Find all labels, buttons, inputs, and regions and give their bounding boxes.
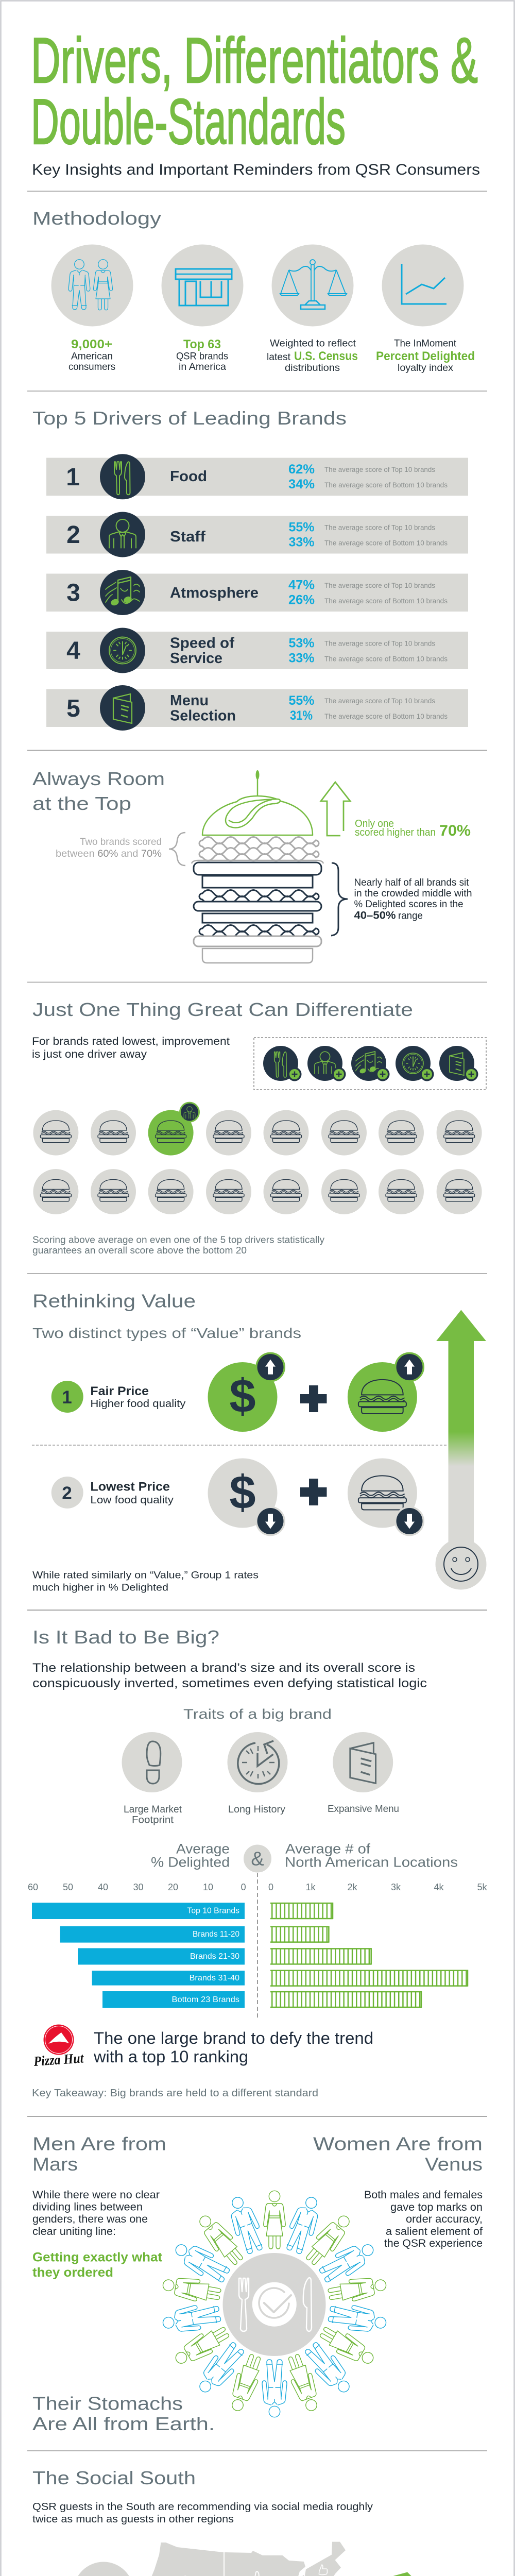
axis labels: 50	[63, 1882, 73, 1892]
stat: census weighting: latest	[267, 352, 291, 363]
text: both males and females: order accuracy,	[406, 2213, 483, 2225]
icon: long history clock	[228, 1732, 287, 1792]
panel: top 5 drivers	[32, 408, 468, 731]
text: both males and females: the QSR experience	[384, 2238, 483, 2249]
subheading: traits: Traits of a big brand	[183, 1706, 332, 1722]
stat: 9,000+ consumers: 9,000+	[71, 337, 112, 351]
driver row 1: food: 62%	[288, 462, 315, 477]
axis labels: 0	[268, 1882, 273, 1892]
people ring	[161, 2191, 388, 2417]
bar chart: average % delighted: Brands 21-30	[190, 1952, 239, 1961]
item: lowest price: 2	[62, 1483, 72, 1503]
panel: methodology	[32, 208, 475, 374]
heading: their stomachs	[32, 2393, 215, 2434]
driver row 3: atmosphere: Atmosphere	[170, 585, 259, 601]
stat: percent delighted index	[376, 338, 475, 374]
burger grid	[33, 1102, 482, 1214]
axis labels: 5k	[477, 1882, 488, 1892]
driver row 5: menu selection: 31%	[290, 708, 313, 723]
driver row 2: staff: 33%	[288, 535, 314, 549]
stat: percent delighted index: loyalty index	[398, 363, 454, 374]
heading: women are from venus: Venus	[425, 2154, 483, 2175]
item: lowest price: $	[229, 1466, 256, 1519]
driver row 1: food: The average score of Bottom 10 brands	[324, 481, 448, 489]
axis labels: 10	[203, 1882, 213, 1892]
stat: top 63 brands	[176, 337, 228, 372]
text: both males and females: Both males and females	[364, 2189, 483, 2201]
heading: men are from mars: Men Are from	[32, 2133, 166, 2155]
heading: always room at the top	[32, 768, 165, 814]
text: both males and females	[364, 2189, 483, 2249]
item: fair price	[52, 1352, 424, 1432]
text: group 1 rates higher: While rated similarly on “Value,” Group 1 rates	[32, 1570, 259, 1581]
text: one large brand: with a top 10 ranking	[93, 2047, 248, 2066]
text: no clear dividing lines	[32, 2189, 160, 2238]
driver row 4: speed of service: 33%	[288, 651, 314, 665]
callout: two brands 60-70%: between 60% and 70%	[56, 849, 162, 859]
dashed box: driver icons	[254, 1038, 486, 1090]
text: guests in the south: twice as much as guests in other regions	[32, 2514, 234, 2525]
icon: footprint	[122, 1732, 182, 1792]
callout: only one above 70%: Only one	[355, 818, 394, 829]
heading: top 5 drivers: Top 5 Drivers of Leading Brands	[32, 408, 347, 429]
icon: stacked burger	[192, 770, 323, 963]
callout: crowded middle: % Delighted scores in the	[354, 899, 464, 910]
axis labels: 4k	[434, 1882, 444, 1892]
icon: store	[162, 244, 243, 327]
text: group 1 rates higher	[32, 1570, 259, 1593]
text: group 1 rates higher: much higher in % Delighted	[32, 1583, 168, 1593]
trait labels	[124, 1804, 399, 1826]
callout: two brands 60-70%: Two brands scored	[80, 837, 162, 848]
axis labels: 0	[241, 1882, 246, 1892]
text: scoring above average: Scoring above average on even one of the 5 top drivers statistically	[32, 1234, 324, 1245]
panel: just one thing great	[32, 999, 486, 1256]
panel: always room at the top	[32, 768, 472, 963]
axis labels: 20	[168, 1882, 178, 1892]
panel: is it bad to be big	[28, 1626, 488, 2099]
heading: social south: The Social South	[32, 2467, 196, 2488]
text: relationship: conspicuously inverted, sometimes even defying statistical logic	[32, 1676, 427, 1690]
icon: scales	[272, 244, 353, 327]
item: fair price: Higher food quality	[90, 1398, 185, 1410]
subtitle: Key Insights and Important Reminders from QSR Consumers	[32, 161, 480, 178]
callout: only one above 70%	[355, 818, 471, 839]
heading: always room at the top: Always Room	[32, 768, 165, 789]
driver row 5: menu selection: The average score of Top 10 brands	[324, 697, 435, 705]
heading: men are from mars	[32, 2133, 166, 2175]
item: fair price: Fair Price	[90, 1384, 149, 1398]
heading: always room at the top: at the Top	[32, 793, 131, 814]
stat: percent delighted index: Percent Delighted	[376, 349, 475, 363]
callout: getting what they ordered: Getting exactly what	[32, 2250, 163, 2265]
trait labels: Expansive Menu	[328, 1804, 399, 1815]
arrow: up outline	[321, 782, 350, 836]
icon: consumers	[52, 244, 133, 327]
driver row 4: speed of service: 53%	[288, 636, 314, 650]
trait labels: Long History	[228, 1804, 286, 1815]
bar chart: average % delighted	[32, 1903, 245, 2008]
axis labels: 30	[133, 1882, 144, 1892]
driver row 1: food: 34%	[288, 477, 315, 492]
axis labels: 1k	[305, 1882, 316, 1892]
heading: women are from venus: Women Are from	[313, 2133, 483, 2155]
panel: men and women	[32, 2133, 483, 2434]
stat: 9,000+ consumers: consumers	[68, 362, 115, 372]
driver row 2: staff: Staff	[170, 529, 205, 545]
item: fair price: $	[229, 1370, 256, 1422]
driver row 1: food: The average score of Top 10 brands	[324, 465, 435, 473]
chart headers: &	[251, 1849, 264, 1870]
driver row 4: speed of service: 4	[66, 637, 80, 665]
bar chart: average # of locations	[270, 1903, 468, 2008]
callout: crowded middle: in the crowded middle with	[354, 888, 472, 899]
stat: census weighting	[267, 338, 358, 374]
stat: census weighting: Weighted to reflect	[270, 338, 356, 349]
axis labels: 3k	[391, 1882, 401, 1892]
text: one large brand	[93, 2029, 373, 2066]
driver row 2: staff: The average score of Bottom 10 brands	[324, 539, 448, 547]
brace: navy	[331, 863, 348, 936]
text: both males and females: gave top marks on	[390, 2201, 483, 2213]
heading: their stomachs: Are All from Earth.	[32, 2413, 215, 2434]
text: no clear dividing lines: clear uniting line:	[32, 2226, 116, 2238]
driver row 3: atmosphere: The average score of Bottom 10 brands	[324, 597, 448, 605]
text: relationship	[32, 1661, 427, 1690]
trait labels: Large Market	[124, 1804, 182, 1815]
item: lowest price: Lowest Price	[90, 1480, 170, 1494]
subheading: two types: Two distinct types of “Value” brands	[32, 1325, 301, 1341]
brace: grey	[169, 833, 185, 866]
callout: crowded middle: 40–50%	[354, 910, 396, 921]
heading: their stomachs: Their Stomachs	[32, 2393, 183, 2414]
driver row 1: food: 1	[66, 464, 80, 491]
text: no clear dividing lines: While there were no clear	[32, 2189, 160, 2201]
driver row 4: speed of service: Service	[170, 650, 222, 667]
icon: expansive menu	[333, 1732, 393, 1792]
text: both males and females: a salient element of	[386, 2226, 483, 2238]
item: lowest price	[52, 1458, 424, 1536]
driver row 4: speed of service: The average score of Top 10 brands	[324, 639, 435, 647]
callout: 1 in 5	[73, 2562, 149, 2576]
heading: women are from venus	[313, 2133, 483, 2175]
panel: rethinking value	[32, 1290, 486, 1593]
driver row 3: atmosphere	[46, 570, 468, 615]
callout: only one above 70%: scored higher than	[355, 827, 436, 838]
bar chart: average % delighted: Brands 11-20	[193, 1930, 239, 1939]
stat: top 63 brands: in America	[179, 362, 226, 372]
stat: census weighting: U.S. Census	[294, 349, 358, 363]
driver row 5: menu selection: 55%	[288, 693, 314, 708]
text: key takeaway: Key Takeaway: Big brands are held to a different standard	[32, 2088, 318, 2099]
driver row 4: speed of service: The average score of Bottom 10 brands	[324, 654, 448, 663]
axis labels: 40	[98, 1882, 108, 1892]
text: guests in the south: QSR guests in the South are recommending via social media roughly	[32, 2501, 373, 2513]
chart headers	[151, 1841, 458, 1872]
driver row 2: staff: 2	[66, 521, 80, 549]
title	[31, 25, 478, 158]
driver row 3: atmosphere: The average score of Top 10 brands	[324, 581, 435, 589]
stat: top 63 brands: Top 63	[183, 337, 221, 351]
heading: just one thing great: Just One Thing Great Can Differentiate	[32, 999, 413, 1020]
item: lowest price: Low food quality	[90, 1495, 174, 1506]
icon: line chart	[382, 244, 464, 327]
text: scoring above average: guarantees an overall score above the bottom 20	[32, 1245, 247, 1256]
driver row 2: staff	[46, 512, 468, 557]
callout: crowded middle: Nearly half of all brands sit	[354, 877, 469, 888]
heading: rethinking value: Rethinking Value	[32, 1290, 196, 1312]
heading: men are from mars: Mars	[32, 2154, 78, 2175]
item: fair price: 1	[62, 1387, 72, 1408]
callout: getting what they ordered: they ordered	[32, 2265, 113, 2280]
bar chart: average % delighted: Brands 31-40	[190, 1974, 239, 1982]
driver row 5: menu selection: 5	[66, 695, 80, 722]
panel: the social south	[32, 2467, 482, 2576]
driver row 1: food: Food	[170, 468, 207, 485]
driver row 1: food	[46, 454, 468, 499]
text: relationship: The relationship between a brand’s size and its overall score is	[32, 1661, 415, 1675]
text: improvement	[32, 1036, 230, 1060]
text: improvement: For brands rated lowest, improvement	[32, 1036, 230, 1047]
logo: pizza hut	[32, 2025, 85, 2069]
bar chart: average % delighted: Top 10 Brands	[187, 1907, 239, 1916]
text: no clear dividing lines: dividing lines between	[32, 2201, 143, 2213]
driver row 2: staff: 55%	[288, 520, 314, 534]
driver row 5: menu selection: Menu	[170, 692, 209, 709]
arrow: value thermometer	[436, 1310, 486, 1590]
axis labels: 2k	[347, 1882, 358, 1892]
axis labels: 60	[28, 1882, 38, 1892]
stat: 9,000+ consumers: American	[71, 351, 113, 362]
callout: getting what they ordered	[32, 2250, 163, 2280]
callout: crowded middle: range	[398, 911, 423, 921]
chart headers: % Delighted	[151, 1855, 230, 1870]
driver row 4: speed of service: Speed of	[170, 635, 234, 651]
driver row 5: menu selection	[46, 685, 468, 731]
axis labels	[28, 1882, 488, 1892]
driver row 2: staff: The average score of Top 10 brands	[324, 523, 435, 532]
callout: crowded middle	[354, 877, 472, 921]
chart headers: North American Locations	[285, 1855, 458, 1870]
text: guests in the south	[32, 2501, 373, 2525]
text: improvement: is just one driver away	[32, 1048, 147, 1060]
driver row 5: menu selection: Selection	[170, 708, 236, 724]
stat: census weighting: distributions	[285, 363, 340, 374]
driver row 3: atmosphere: 3	[66, 579, 80, 607]
driver row 3: atmosphere: 26%	[288, 592, 315, 607]
chart headers: Average	[176, 1841, 230, 1857]
icon: plate with check	[222, 2253, 325, 2356]
trait labels: Footprint	[132, 1815, 174, 1826]
text: no clear dividing lines: genders, there was one	[32, 2213, 148, 2225]
stat: 9,000+ consumers	[68, 337, 115, 372]
bar chart: average % delighted: Bottom 23 Brands	[172, 1995, 239, 2004]
logo: pizza hut: Pizza Hut	[32, 2050, 85, 2069]
chart headers: Average # of	[285, 1841, 371, 1857]
stat: percent delighted index: The InMoment	[394, 338, 457, 349]
map: united states regions	[150, 2542, 419, 2576]
driver row 4: speed of service	[46, 628, 468, 673]
text: one large brand: The one large brand to defy the trend	[94, 2029, 373, 2047]
heading: is it bad to be big: Is It Bad to Be Big?	[32, 1626, 219, 1648]
driver row 5: menu selection: The average score of Bottom 10 brands	[324, 712, 448, 720]
heading: methodology: Methodology	[32, 208, 161, 229]
stat: top 63 brands: QSR brands	[176, 351, 228, 362]
text: scoring above average	[32, 1234, 324, 1256]
callout: only one above 70%: 70%	[439, 822, 471, 839]
callout: two brands 60-70%	[56, 837, 162, 859]
driver row 3: atmosphere: 47%	[288, 578, 315, 592]
